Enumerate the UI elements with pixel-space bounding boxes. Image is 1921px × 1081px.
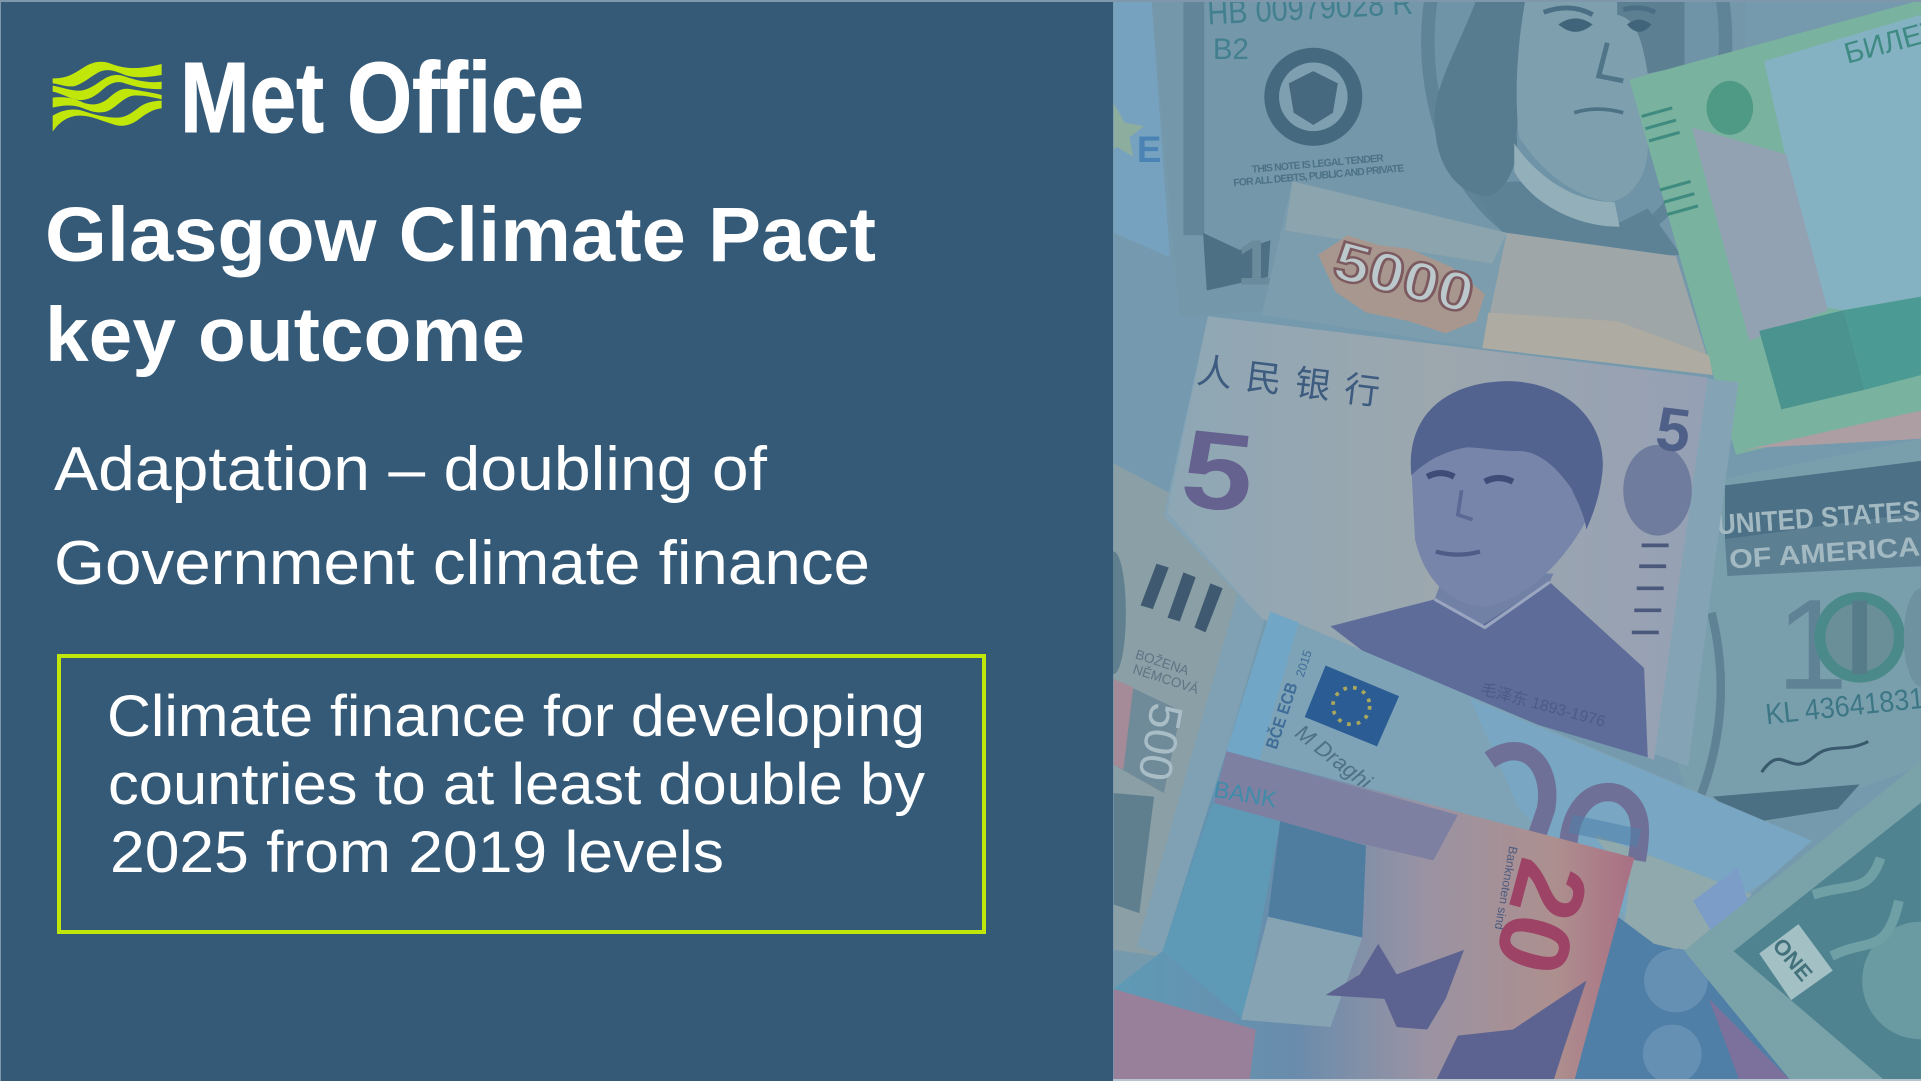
banknote: euro 20 xyxy=(1226,612,1812,950)
callout text: Climate finance for developing xyxy=(107,684,925,749)
banknote: Russian 5000 ruble orange xyxy=(1262,181,1713,375)
jacket xyxy=(1484,182,1679,255)
banknote: Czech 500: NĚMCOVÁ xyxy=(1131,661,1200,697)
right-hand hatch panel xyxy=(1623,394,1694,632)
dark hair right xyxy=(1617,0,1685,74)
icon: waves xyxy=(53,62,162,132)
banknote: US 100 dollar right xyxy=(1698,461,1921,820)
issuer text: BČE ECB xyxy=(1261,680,1302,751)
callout text: 2025 from 2019 levels xyxy=(110,820,724,885)
ornamental arc xyxy=(1698,612,1725,796)
banknote: US 100 dollar top xyxy=(1184,2,1732,290)
banknote: Czech 500: BOŽENA xyxy=(1134,647,1191,678)
banknote: US one dollar xyxy=(1685,761,1921,1081)
title: key outcome xyxy=(45,292,525,378)
legal tender note: THIS NOTE IS LEGAL TENDER xyxy=(1251,153,1385,176)
photo base xyxy=(1113,0,1921,1081)
banknote: Czech 500: 500 xyxy=(1128,699,1193,785)
Mao portrait xyxy=(1330,381,1648,757)
photo: banknotes collage xyxy=(1101,0,1921,1081)
banknote: bottom blue xyxy=(1574,907,1791,1081)
rosette xyxy=(1318,235,1485,333)
banknote: euro strip at top left xyxy=(1114,2,1170,257)
ONE label xyxy=(1759,924,1833,1000)
big 20 numeral xyxy=(1490,751,1640,860)
Franklin portrait xyxy=(1421,0,1732,257)
20 numeral: 20 xyxy=(1473,849,1610,986)
banknote: US 100 dollar right: OF AMERICA xyxy=(1728,531,1921,575)
banknote: US one dollar: ONE xyxy=(1768,933,1818,986)
title: Glasgow Climate Pact xyxy=(45,192,876,278)
banknote: Czech 500 xyxy=(1113,464,1264,956)
caption: 毛泽东 1893-1976 xyxy=(1479,680,1608,731)
BANK word: BANK xyxy=(1212,776,1279,813)
logo: Met Office xyxy=(53,42,584,154)
hair xyxy=(1434,2,1525,194)
callout: climate finance box xyxy=(59,656,984,932)
banknote: euro 20: 2015 xyxy=(1293,648,1315,679)
bank name: 人民银行 xyxy=(1195,351,1382,413)
coat of arms xyxy=(1707,81,1753,135)
banknote: US 100 dollar top: 1 xyxy=(1237,226,1273,298)
wordmark: Met Office xyxy=(180,42,584,154)
title xyxy=(45,192,876,378)
subtitle: Government climate finance xyxy=(54,529,870,598)
banknote: Russian green xyxy=(1629,0,1921,455)
banknote: Chinese 5 yuan xyxy=(1164,316,1738,766)
Federal Reserve seal xyxy=(1264,48,1362,146)
signature: M Draghi xyxy=(1291,720,1377,795)
panel: blue background xyxy=(0,0,1113,1081)
callout text: countries to at least double by xyxy=(108,752,925,817)
numeral 5 left: 5 xyxy=(1176,406,1260,536)
banknote: Swiss 20 franc xyxy=(1114,751,1634,1081)
subtitle xyxy=(54,435,870,598)
vertical small print: Banknoten sind xyxy=(1492,845,1520,931)
callout text xyxy=(107,684,925,885)
face xyxy=(1517,0,1666,202)
numeral 100 and seal xyxy=(1786,588,1921,689)
banknote: US 100 dollar top: B2 xyxy=(1213,33,1249,66)
banknote: US 100 dollar top: FOR ALL DEBTS, PUBLIC AND PRIVATE xyxy=(1233,163,1405,189)
right-hand hatch panel: 5 xyxy=(1652,394,1694,466)
butterflies xyxy=(1326,944,1587,1081)
collar xyxy=(1514,143,1620,227)
5000 numeral: 5000 xyxy=(1327,229,1481,325)
euro flag xyxy=(1305,666,1399,746)
banknote: euro strip at top left: E xyxy=(1137,129,1161,170)
numeral 100 and seal: 1 xyxy=(1776,574,1848,717)
subtitle: Adaptation – doubling of xyxy=(54,435,768,504)
